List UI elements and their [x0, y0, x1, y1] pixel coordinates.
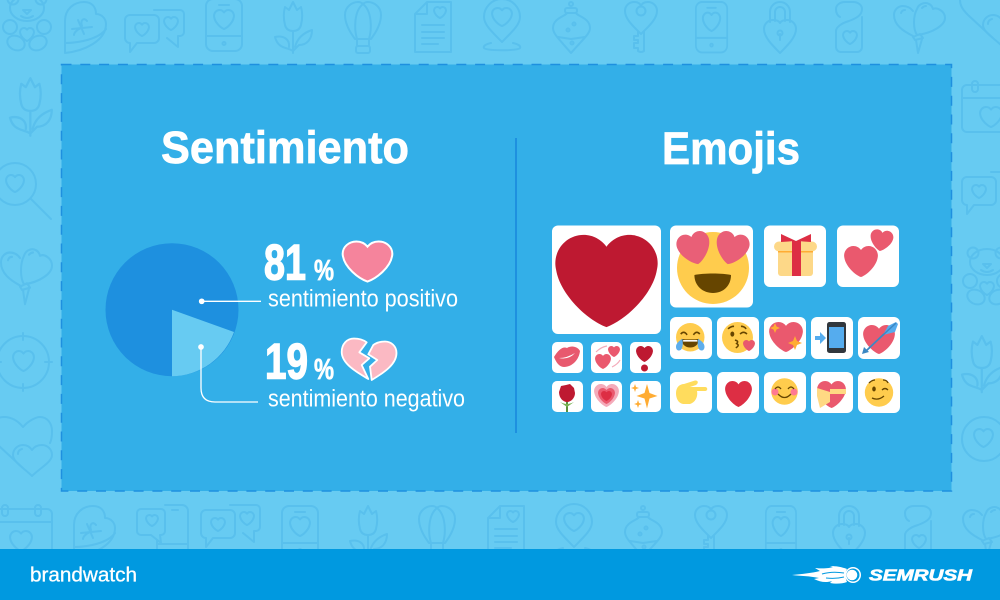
icon: chat bottom — [201, 505, 260, 547]
emoji: sparkling heart — [764, 317, 806, 359]
icon: phone bottom right — [766, 506, 796, 558]
icon: lock bottom — [833, 506, 865, 557]
heading: Emojis: Emojis — [662, 123, 800, 174]
icon: map pin — [484, 0, 520, 50]
icon: heart balloons — [894, 3, 945, 53]
icon: hot-air balloon — [345, 2, 381, 53]
emoji: large heart — [552, 226, 661, 334]
footer bar — [0, 549, 1000, 600]
emoji: sparkles — [630, 381, 661, 412]
emoji: heart exclamation — [630, 342, 661, 373]
leader line: negative — [199, 345, 258, 402]
leader line: positive — [200, 299, 261, 303]
heading: Sentimiento: Sentimiento — [161, 122, 409, 173]
icon: balloons left — [1, 249, 52, 304]
label: sentimiento negativo: sentimiento negativo — [268, 386, 465, 412]
panel: main content — [62, 64, 952, 491]
icon: hearts left — [0, 417, 52, 476]
label: sentimiento positivo: sentimiento positivo — [268, 286, 458, 312]
icon: teddy right — [963, 248, 1000, 307]
icon: hanger bottom — [905, 506, 931, 556]
icon: broken heart — [342, 338, 396, 380]
icon: rose — [275, 2, 312, 53]
icon: calendar right — [962, 81, 1000, 132]
emoji: smiling face — [764, 372, 806, 413]
divider — [515, 138, 517, 433]
icon: heart lock — [764, 2, 796, 53]
emoji: gift — [764, 226, 826, 287]
stat: 19%: % — [314, 354, 334, 386]
icon: calendar bottom — [0, 505, 52, 556]
icon: balloons bottom — [963, 507, 1000, 557]
emoji: heart with arrow — [858, 317, 900, 359]
icon: door hanger — [836, 2, 862, 52]
emoji: two hearts — [837, 226, 899, 287]
emoji: winking face — [858, 372, 900, 413]
icon: phone bottom — [282, 506, 318, 558]
emoji: growing heart — [591, 381, 622, 412]
icon: two hearts — [960, 0, 1000, 46]
pie chart — [106, 243, 238, 376]
icon: heart chocolate box — [65, 2, 106, 53]
icon: phone small — [696, 2, 727, 52]
icon: potion — [553, 2, 590, 53]
icon: circle heart right — [962, 417, 1000, 461]
emoji: kissing heart — [717, 317, 759, 359]
icon: heart key — [625, 2, 657, 52]
emoji: phone with arrow — [811, 317, 853, 359]
icon: love letter — [415, 2, 451, 52]
icon: pin bottom — [556, 504, 592, 555]
emoji: tears of joy — [670, 317, 712, 359]
emoji: rose — [552, 381, 583, 412]
pie slice: negative 19% — [172, 310, 234, 376]
emoji: heart with ribbon — [811, 372, 853, 413]
emoji: revolving hearts — [591, 342, 622, 373]
emoji: red heart — [717, 372, 759, 413]
emoji: lips — [552, 342, 583, 373]
icon: letter bottom — [488, 506, 524, 556]
icon: chat right — [962, 172, 1000, 214]
logo: brandwatch: brandwatch — [30, 564, 137, 586]
icon: magnifier — [0, 163, 51, 219]
icon: phone — [206, 0, 242, 51]
emoji: pointing hand — [670, 372, 712, 413]
icon: rose bottom — [350, 506, 387, 557]
icon: phone with bubble — [137, 505, 188, 551]
emoji: heart eyes — [670, 226, 753, 308]
icon: key bottom — [695, 506, 727, 556]
logo: semrush fireball — [792, 566, 861, 584]
icon: chat bubbles — [125, 10, 184, 52]
icon: balloon bottom — [419, 506, 455, 557]
stat: 81%: % — [314, 255, 334, 287]
icon: teddy bear — [3, 0, 51, 53]
icon: heart box bottom — [74, 506, 115, 557]
icon: target — [0, 333, 52, 391]
icon: pink heart — [343, 241, 392, 282]
stat: 19%: 19 — [265, 334, 308, 390]
icon: rose right — [962, 336, 1000, 392]
stat: 81%: 81 — [264, 234, 306, 290]
logo: semrush wordmark: SEMRUSH — [869, 568, 973, 584]
icon: potion bottom — [625, 506, 662, 557]
pie slice: positive 81% — [106, 243, 238, 376]
icon: rose left — [10, 78, 52, 136]
